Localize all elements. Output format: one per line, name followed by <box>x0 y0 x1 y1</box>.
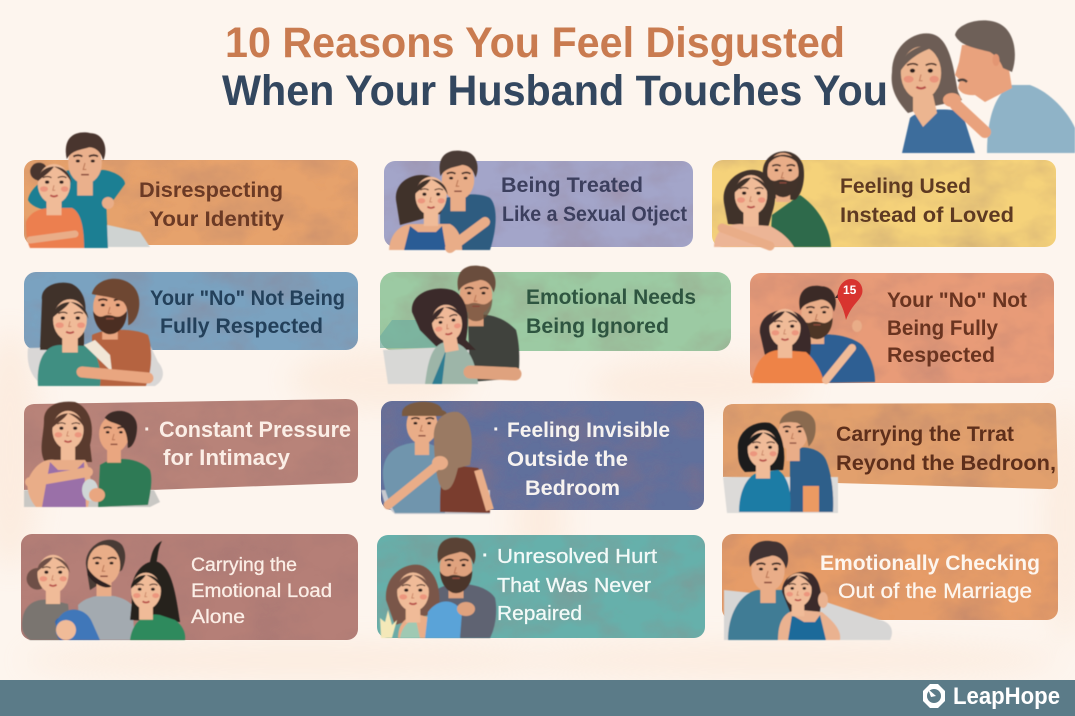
card background <box>723 403 1058 489</box>
card background <box>722 534 1058 620</box>
title: When Your Husband Touches You <box>222 67 888 115</box>
label text <box>139 178 284 231</box>
icon: cap <box>402 402 446 416</box>
label text: · <box>493 419 500 441</box>
label text: Your "No" Not Being <box>150 287 345 310</box>
label text <box>191 555 332 628</box>
card background <box>712 160 1056 247</box>
label text: Repaired <box>497 602 582 625</box>
panel: disrespecting your identity <box>24 132 358 248</box>
illustration: couple <box>724 541 892 640</box>
icon: notification badge <box>835 279 863 320</box>
label text <box>501 174 687 226</box>
label text: Unresolved Hurt <box>497 545 657 568</box>
label text <box>820 551 1040 603</box>
label text: Your Identity <box>149 207 284 231</box>
panel: constant pressure for intimacy <box>24 399 358 507</box>
panel: emotional needs being ignored <box>380 266 731 384</box>
illustration: couple <box>752 286 875 383</box>
illustration: couple <box>28 279 163 386</box>
label text: Emotional Needs <box>526 286 696 309</box>
card background <box>24 399 358 490</box>
illustration: couple <box>714 151 831 247</box>
label text <box>150 287 345 338</box>
label text: Being Treated <box>501 174 643 197</box>
label text: Being Ignored <box>526 315 669 338</box>
illustration: couple <box>723 411 838 513</box>
panel: your no not being fully respected (coral) <box>750 273 1054 383</box>
card background <box>384 161 693 247</box>
card background <box>377 535 705 638</box>
brand name: LeapHope <box>953 683 1060 710</box>
label text: Emotionally Checking <box>820 551 1040 575</box>
label text <box>493 418 670 500</box>
label text: Outside the <box>507 447 628 471</box>
blue-green wash <box>380 320 457 348</box>
label text: That Was Never <box>497 574 651 597</box>
illustration: couple <box>380 538 496 638</box>
label text: for Intimacy <box>163 445 291 470</box>
card background <box>24 272 358 350</box>
icon: flowers <box>380 610 397 638</box>
panel: your no not being fully respected (blue) <box>24 272 358 386</box>
panel: feeling used instead of loved <box>712 151 1056 247</box>
label text: Emotional Load <box>191 581 332 602</box>
label text: Feeling Used <box>840 175 971 198</box>
label text: Reyond the Bedroon, <box>836 451 1056 475</box>
panel: carrying the trrat beyond the bedroom <box>723 403 1058 513</box>
panel: being treated like a sexual object <box>384 151 693 250</box>
watercolor background washes <box>0 330 1075 678</box>
icon: logo <box>923 684 945 708</box>
illustration: couple <box>26 132 150 248</box>
panel: carrying the emotional load alone <box>21 534 358 640</box>
label text: Out of the Marriage <box>838 579 1032 603</box>
label text <box>144 417 351 470</box>
panel: feeling invisible outside the bedroom <box>381 401 704 514</box>
illustration: couple <box>381 402 490 514</box>
label text: Alone <box>191 607 245 628</box>
title: 10 Reasons You Feel Disgusted <box>225 19 845 67</box>
label text <box>526 286 696 338</box>
illustration: couple <box>383 266 519 384</box>
label text: Carrying the <box>191 555 297 576</box>
card background <box>381 401 704 510</box>
card background <box>24 160 358 245</box>
label text <box>836 422 1056 475</box>
label text: Instead of Loved <box>840 204 1014 227</box>
label text: Your "No" Not <box>887 289 1027 312</box>
illustration: family <box>22 540 185 640</box>
panel: unresolved hurt that was never repaired <box>377 535 705 638</box>
label text <box>887 289 1027 367</box>
panel: emotionally checking out of the marriage <box>722 534 1058 640</box>
label text: Being Fully <box>887 317 998 340</box>
label text: Carrying the Trrat <box>836 422 1014 446</box>
card background <box>21 534 358 640</box>
label text: Respected <box>887 344 995 367</box>
title <box>222 19 888 115</box>
label text: Fully Respected <box>160 315 323 338</box>
illustration: hero couple <box>892 20 1075 153</box>
card background <box>750 273 1054 383</box>
illustration: couple <box>389 151 496 250</box>
illustration: couple <box>24 402 160 507</box>
label text: Feeling Invisible <box>507 418 670 442</box>
label text: · <box>144 419 151 441</box>
label text: · <box>482 545 489 567</box>
card background <box>380 272 731 351</box>
label text <box>840 175 1014 227</box>
label text <box>482 545 657 625</box>
label text: Bedroom <box>525 476 620 500</box>
label text: Disrespecting <box>139 178 283 202</box>
label text: Constant Pressure <box>159 417 351 442</box>
icon: notification badge: 15 <box>843 283 857 297</box>
label text: Like a Sexual Otject <box>502 203 687 226</box>
footer bar <box>0 680 1075 716</box>
